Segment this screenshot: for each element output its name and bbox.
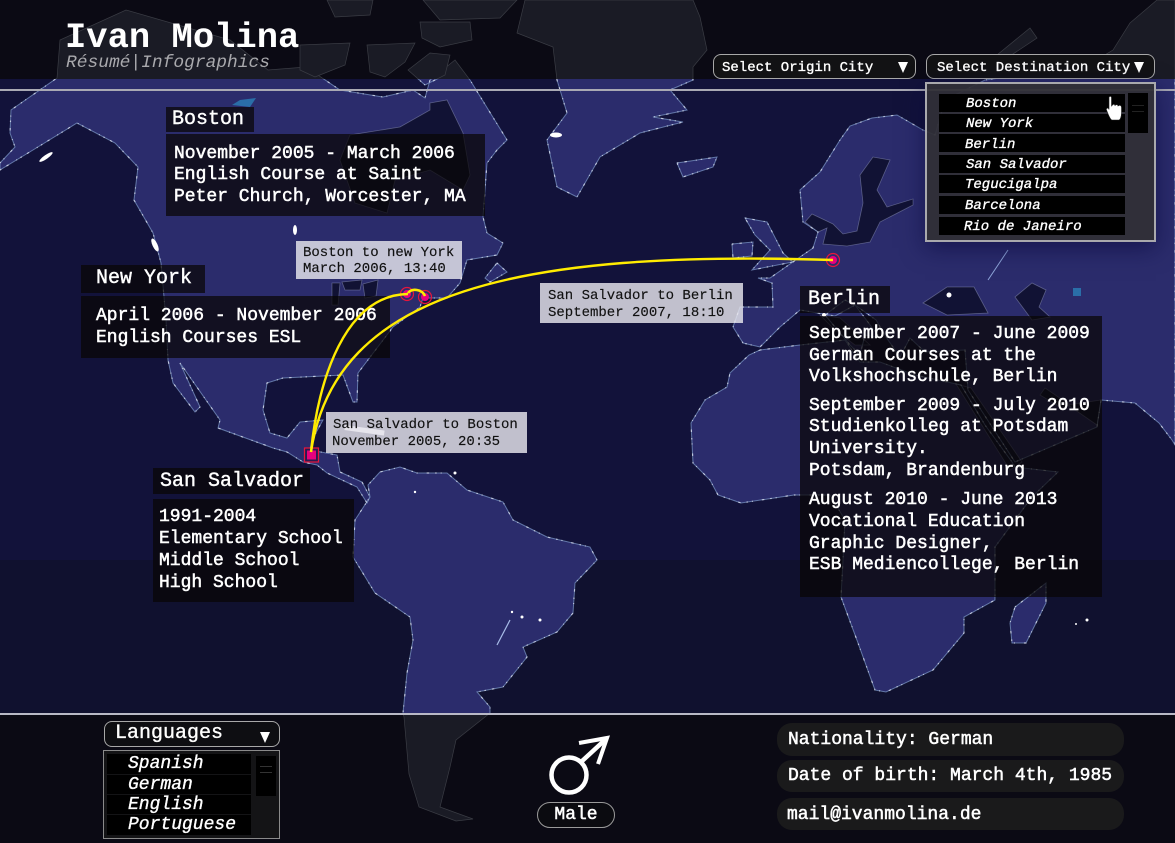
info pill: date of birth: Date of birth: March 4th, 1985 xyxy=(788,766,1112,786)
callout: San Salvador to Boston: San Salvador to Boston xyxy=(333,417,518,433)
list item: Barcelona xyxy=(939,196,1125,214)
panel: New York details: English Courses ESL xyxy=(96,328,301,348)
callout: Boston to New York xyxy=(296,241,462,279)
list item: Tegucigalpa xyxy=(939,175,1125,193)
scrollbar xyxy=(256,756,276,796)
callout: San Salvador to Boston xyxy=(326,412,527,453)
callout: Boston to New York: Boston to new York xyxy=(303,245,454,261)
callout: Boston to New York: March 2006, 13:40 xyxy=(303,261,446,277)
list item: Berlin xyxy=(939,134,1125,152)
panel: Berlin details: ESB Mediencollege, Berlin xyxy=(809,555,1079,575)
list item: Boston: Boston xyxy=(966,96,1016,112)
subtitle: Résumé|Infographics xyxy=(66,53,270,73)
header rule xyxy=(0,89,1175,91)
list item: German: German xyxy=(128,775,193,795)
list item: Tegucigalpa: Tegucigalpa xyxy=(965,177,1057,193)
panel: Berlin details xyxy=(800,316,1102,597)
marker: Berlin xyxy=(826,254,840,266)
panel: New York label xyxy=(81,265,205,293)
route: Boston to New York xyxy=(408,290,425,296)
panel: Boston label: Boston xyxy=(172,108,244,131)
panel: San Salvador label: San Salvador xyxy=(160,470,304,493)
panel: Berlin details: Graphic Designer, xyxy=(809,534,993,554)
marker: Boston xyxy=(418,290,432,304)
panel: Berlin details: Volkshochschule, Berlin xyxy=(809,367,1057,387)
list item: San Salvador xyxy=(939,155,1125,173)
list item: Barcelona: Barcelona xyxy=(965,198,1041,214)
list item: Portuguese: Portuguese xyxy=(128,815,236,835)
list item: Berlin: Berlin xyxy=(965,137,1015,153)
list item: Spanish: Spanish xyxy=(128,754,204,774)
title: Ivan Molina xyxy=(65,17,299,58)
info pill: nationality: Nationality: German xyxy=(788,730,993,750)
panel: destination city list xyxy=(925,82,1156,242)
dropdown: destination city xyxy=(926,54,1155,79)
dropdown: languages xyxy=(104,721,280,747)
icon: hand cursor xyxy=(1106,96,1122,120)
icon: male symbol xyxy=(549,735,610,795)
marker: New York xyxy=(400,288,414,300)
panel: Berlin details: August 2010 - June 2013 xyxy=(809,490,1057,510)
panel: San Salvador details: High School xyxy=(159,573,278,593)
dropdown: origin city: Select Origin City xyxy=(722,60,873,76)
list item: New York xyxy=(939,114,1125,132)
route: San Salvador to Boston xyxy=(311,294,408,452)
panel: San Salvador details: 1991-2004 xyxy=(159,507,256,527)
panel: Berlin details: September 2007 - June 2009 xyxy=(809,324,1090,344)
info pill: email: mail@ivanmolina.de xyxy=(787,805,981,825)
label: Male: Male xyxy=(554,805,598,825)
panel: Boston details: Peter Church, Worcester, MA xyxy=(174,187,466,207)
panel: San Salvador details: Middle School xyxy=(159,551,299,571)
list item: Rio de Janeiro xyxy=(939,217,1125,235)
list item: New York: New York xyxy=(966,116,1033,132)
dropdown: languages: Languages xyxy=(115,722,223,745)
list item: German xyxy=(107,775,251,794)
footer rule xyxy=(0,713,1175,715)
info pill: date of birth xyxy=(777,760,1124,792)
route: San Salvador to Berlin xyxy=(311,259,833,452)
info pill: email xyxy=(777,798,1124,830)
panel: Berlin details: September 2009 - July 2010 xyxy=(809,396,1090,416)
panel: Berlin details: Vocational Education xyxy=(809,512,1025,532)
dropdown: origin city xyxy=(713,54,916,79)
callout: San Salvador to Berlin: San Salvador to Berlin xyxy=(548,288,733,304)
panel: New York details: April 2006 - November 2006 xyxy=(96,306,377,326)
panel: New York label: New York xyxy=(96,267,192,290)
panel: Berlin details: University. xyxy=(809,439,928,459)
panel: Berlin details: Potsdam, Brandenburg xyxy=(809,461,1025,481)
panel: San Salvador details: Elementary School xyxy=(159,529,343,549)
panel: Boston details: English Course at Saint xyxy=(174,165,422,185)
label: Male xyxy=(537,802,615,828)
panel: Berlin label xyxy=(800,286,890,313)
panel: Berlin details: Studienkolleg at Potsdam xyxy=(809,417,1068,437)
callout: San Salvador to Berlin: September 2007, 18:10 xyxy=(548,305,724,321)
list item: Boston xyxy=(939,94,1125,112)
dropdown: destination city: Select Destination City xyxy=(937,60,1130,76)
callout: San Salvador to Boston: November 2005, 20:35 xyxy=(332,434,500,450)
callout: San Salvador to Berlin xyxy=(540,283,743,323)
panel: Berlin label: Berlin xyxy=(808,288,880,311)
panel: Berlin details: German Courses at the xyxy=(809,346,1036,366)
scrollbar xyxy=(1128,93,1148,133)
panel: languages list xyxy=(103,750,280,839)
list item: Spanish xyxy=(107,754,251,774)
panel: Boston details xyxy=(166,134,485,216)
marker: San Salvador xyxy=(304,448,318,462)
list item: English: English xyxy=(128,795,204,815)
list item: Rio de Janeiro: Rio de Janeiro xyxy=(964,219,1082,235)
info pill: nationality xyxy=(777,723,1124,756)
list item: English xyxy=(107,795,251,814)
panel: Boston details: November 2005 - March 2006 xyxy=(174,144,455,164)
panel: New York details xyxy=(81,296,390,358)
panel: San Salvador details xyxy=(153,499,354,602)
list item: San Salvador: San Salvador xyxy=(966,157,1067,173)
